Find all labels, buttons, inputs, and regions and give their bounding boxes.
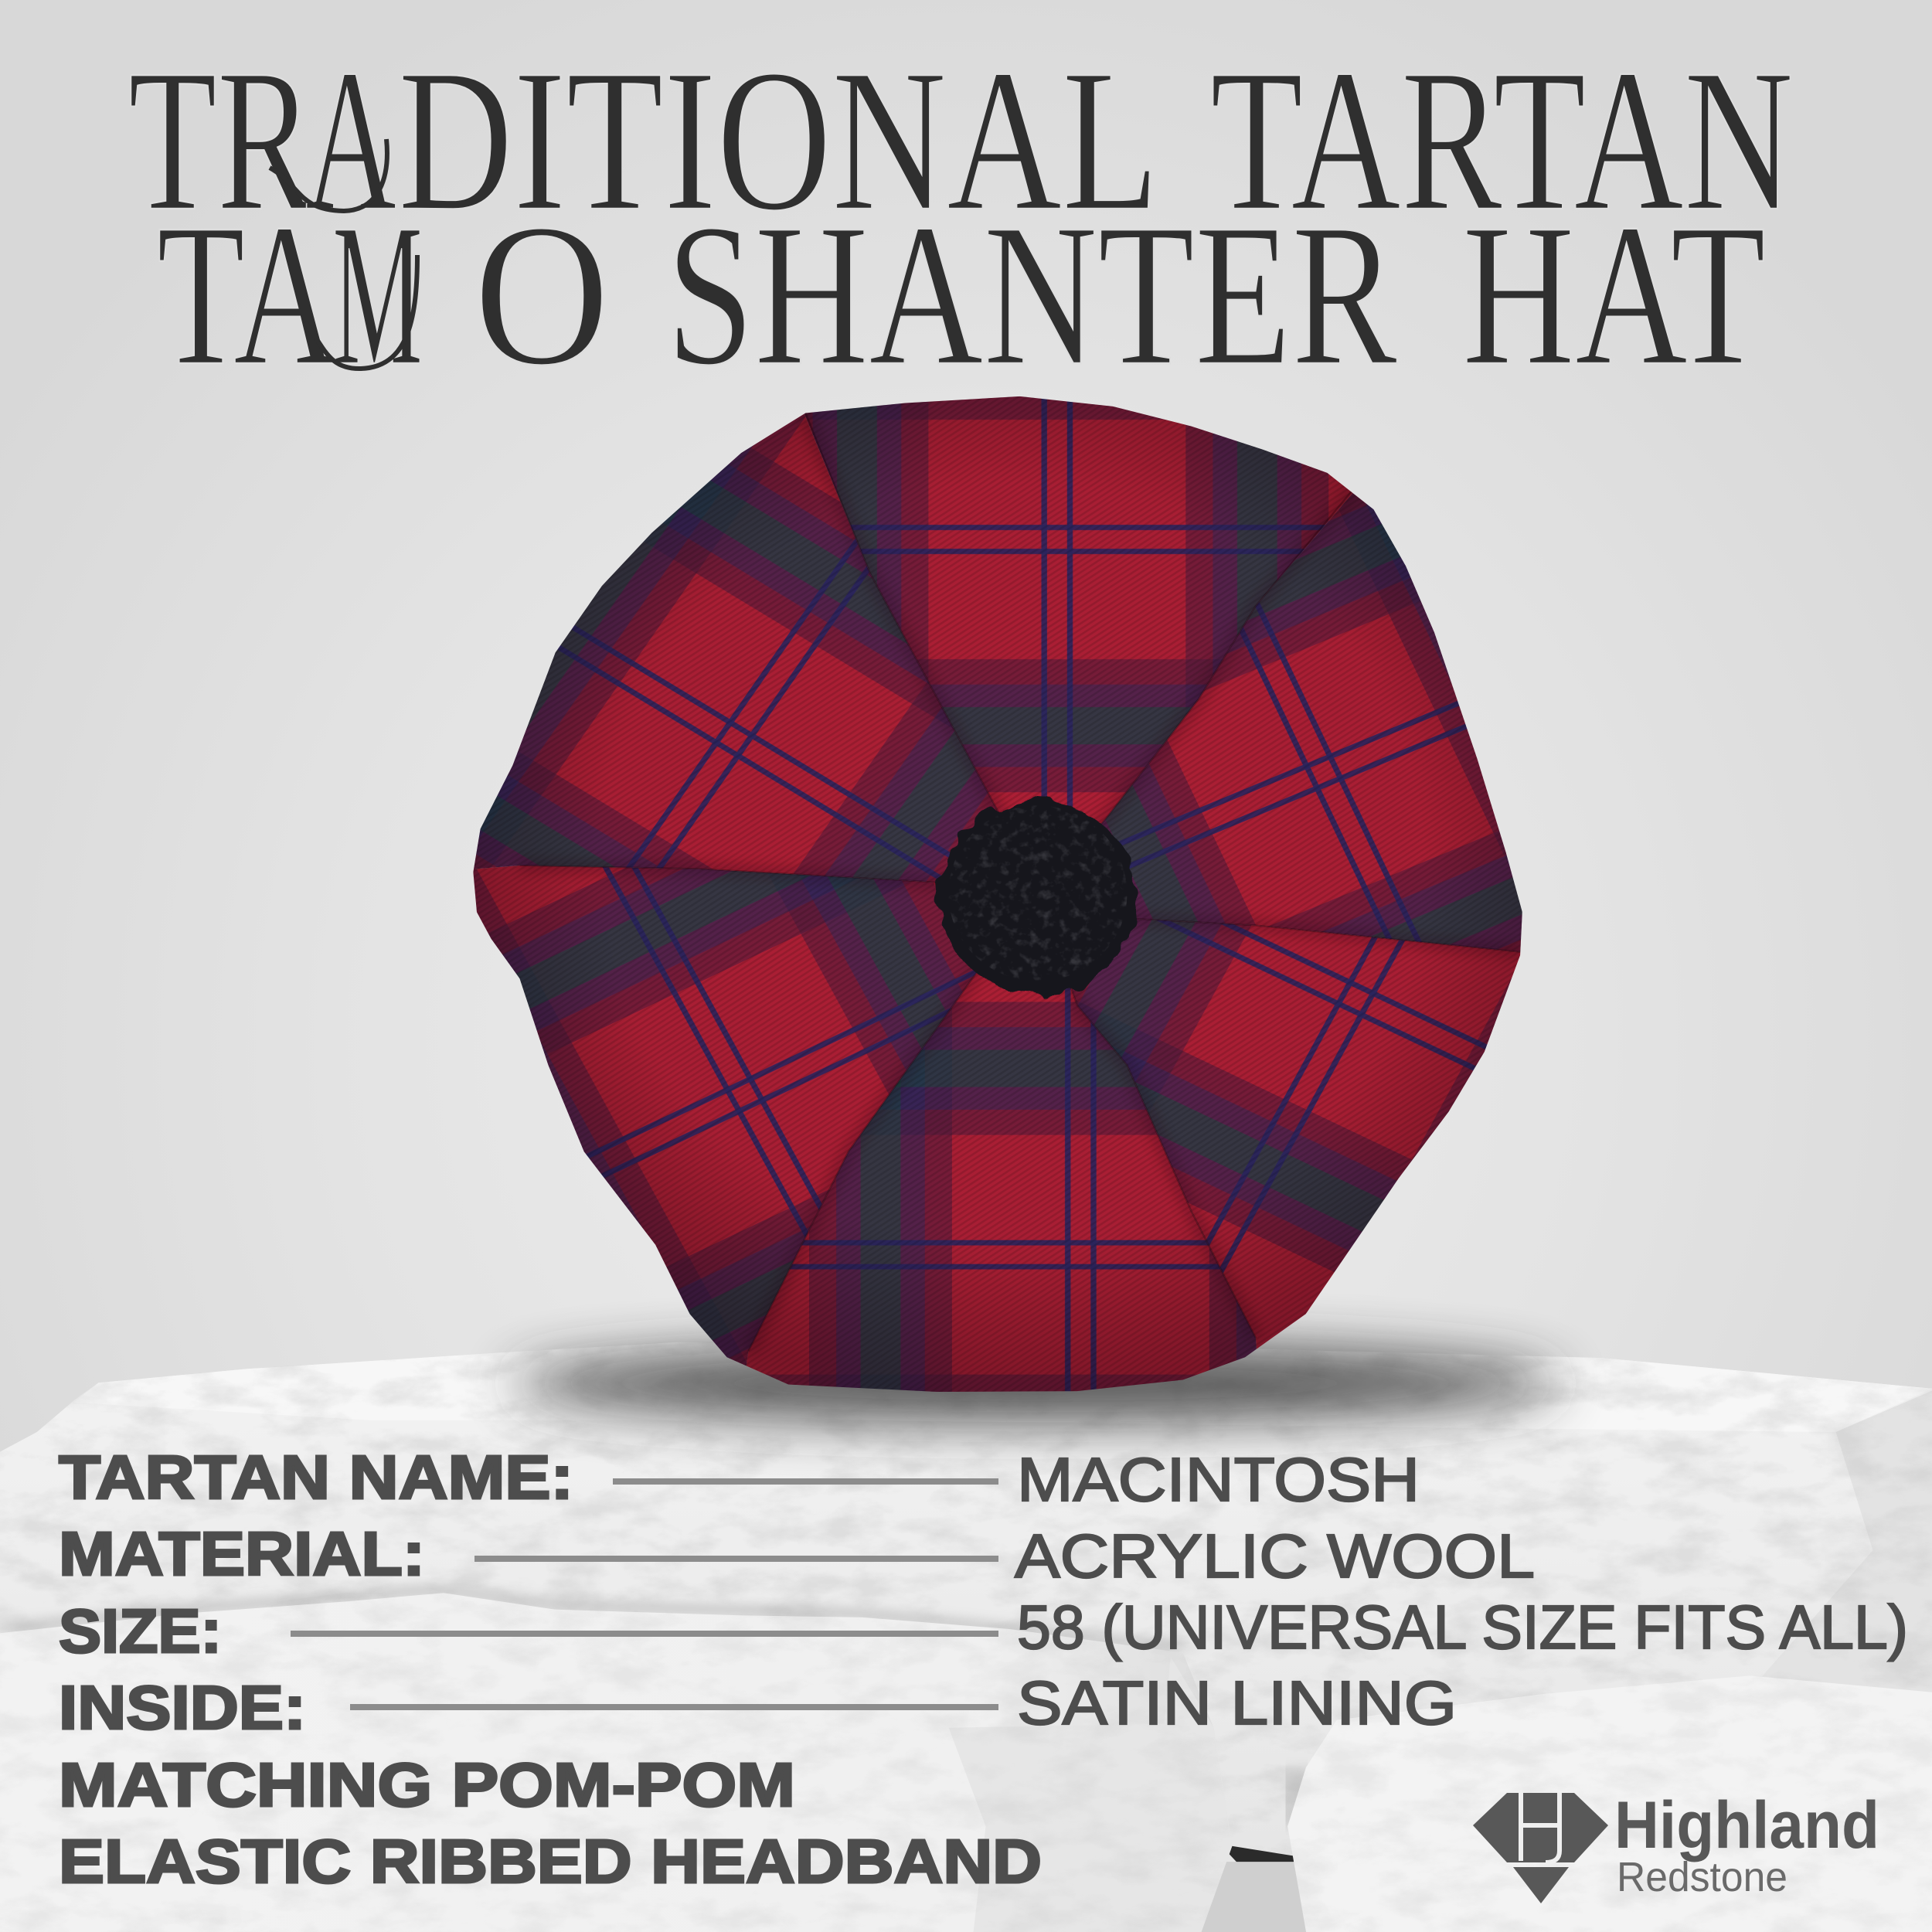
title line 2 — [157, 182, 1766, 408]
title line 1 — [128, 28, 1794, 253]
soft shadow above front rock — [0, 1589, 1183, 1649]
title line 1: A — [305, 28, 396, 253]
title line 2: HAT — [1462, 182, 1766, 408]
panel: bottom left — [473, 866, 977, 1366]
label: material: MATERIAL: — [59, 1519, 425, 1588]
leader line 2 — [474, 1556, 998, 1562]
feature: headband: ELASTIC RIBBED HEADBAND — [59, 1827, 1042, 1896]
fabric twill — [448, 386, 1535, 1404]
title line 2: SHANTER — [666, 182, 1398, 408]
logo wordmark: Highland — [1614, 1788, 1879, 1862]
title swashes — [270, 139, 417, 369]
panel: bottom right — [1071, 919, 1521, 1349]
icon: pom-pom — [939, 799, 1136, 994]
leader line 1 — [613, 1478, 998, 1485]
title line 1: TR — [128, 28, 315, 253]
seams — [519, 413, 1520, 1351]
panel: top right — [1101, 493, 1522, 952]
front left rock — [0, 1593, 1232, 1932]
spec list — [59, 1443, 1908, 1896]
feature: pom-pom: MATCHING POM-POM — [59, 1750, 795, 1819]
main rock — [0, 1342, 1932, 1838]
panel: bottom — [747, 972, 1257, 1392]
panel: top — [804, 396, 1352, 824]
leader line 3 — [291, 1631, 998, 1637]
front rocks — [0, 1589, 1932, 1932]
edge shading — [448, 386, 1535, 1404]
floor and gap — [1196, 1844, 1331, 1932]
front right rock — [1287, 1675, 1932, 1932]
title line 2: O — [474, 182, 610, 408]
logo — [1473, 1788, 1879, 1903]
hat shadow on rock — [510, 1345, 1561, 1422]
logo subtitle: Redstone — [1617, 1854, 1787, 1900]
value: size: 58 (UNIVERSAL SIZE FITS ALL) — [1017, 1593, 1908, 1662]
hat — [473, 396, 1522, 1392]
panel: top left — [474, 414, 998, 883]
label: size: SIZE: — [59, 1597, 222, 1665]
icon: logo mark — [1473, 1793, 1608, 1903]
title line 2: TA — [157, 182, 338, 408]
label: inside: INSIDE: — [59, 1673, 306, 1742]
soft shadow beside right rock — [1287, 1767, 1306, 1826]
label: tartan name: TARTAN NAME: — [59, 1443, 573, 1512]
value: tartan name: MACINTOSH — [1017, 1445, 1420, 1514]
value: material: ACRYLIC WOOL — [1015, 1522, 1535, 1590]
value: inside: SATIN LINING — [1017, 1668, 1457, 1737]
title — [128, 28, 1794, 408]
title line 1: DITIONAL — [398, 28, 1159, 253]
leader line 4 — [350, 1704, 998, 1710]
title line 2: M — [332, 182, 423, 408]
